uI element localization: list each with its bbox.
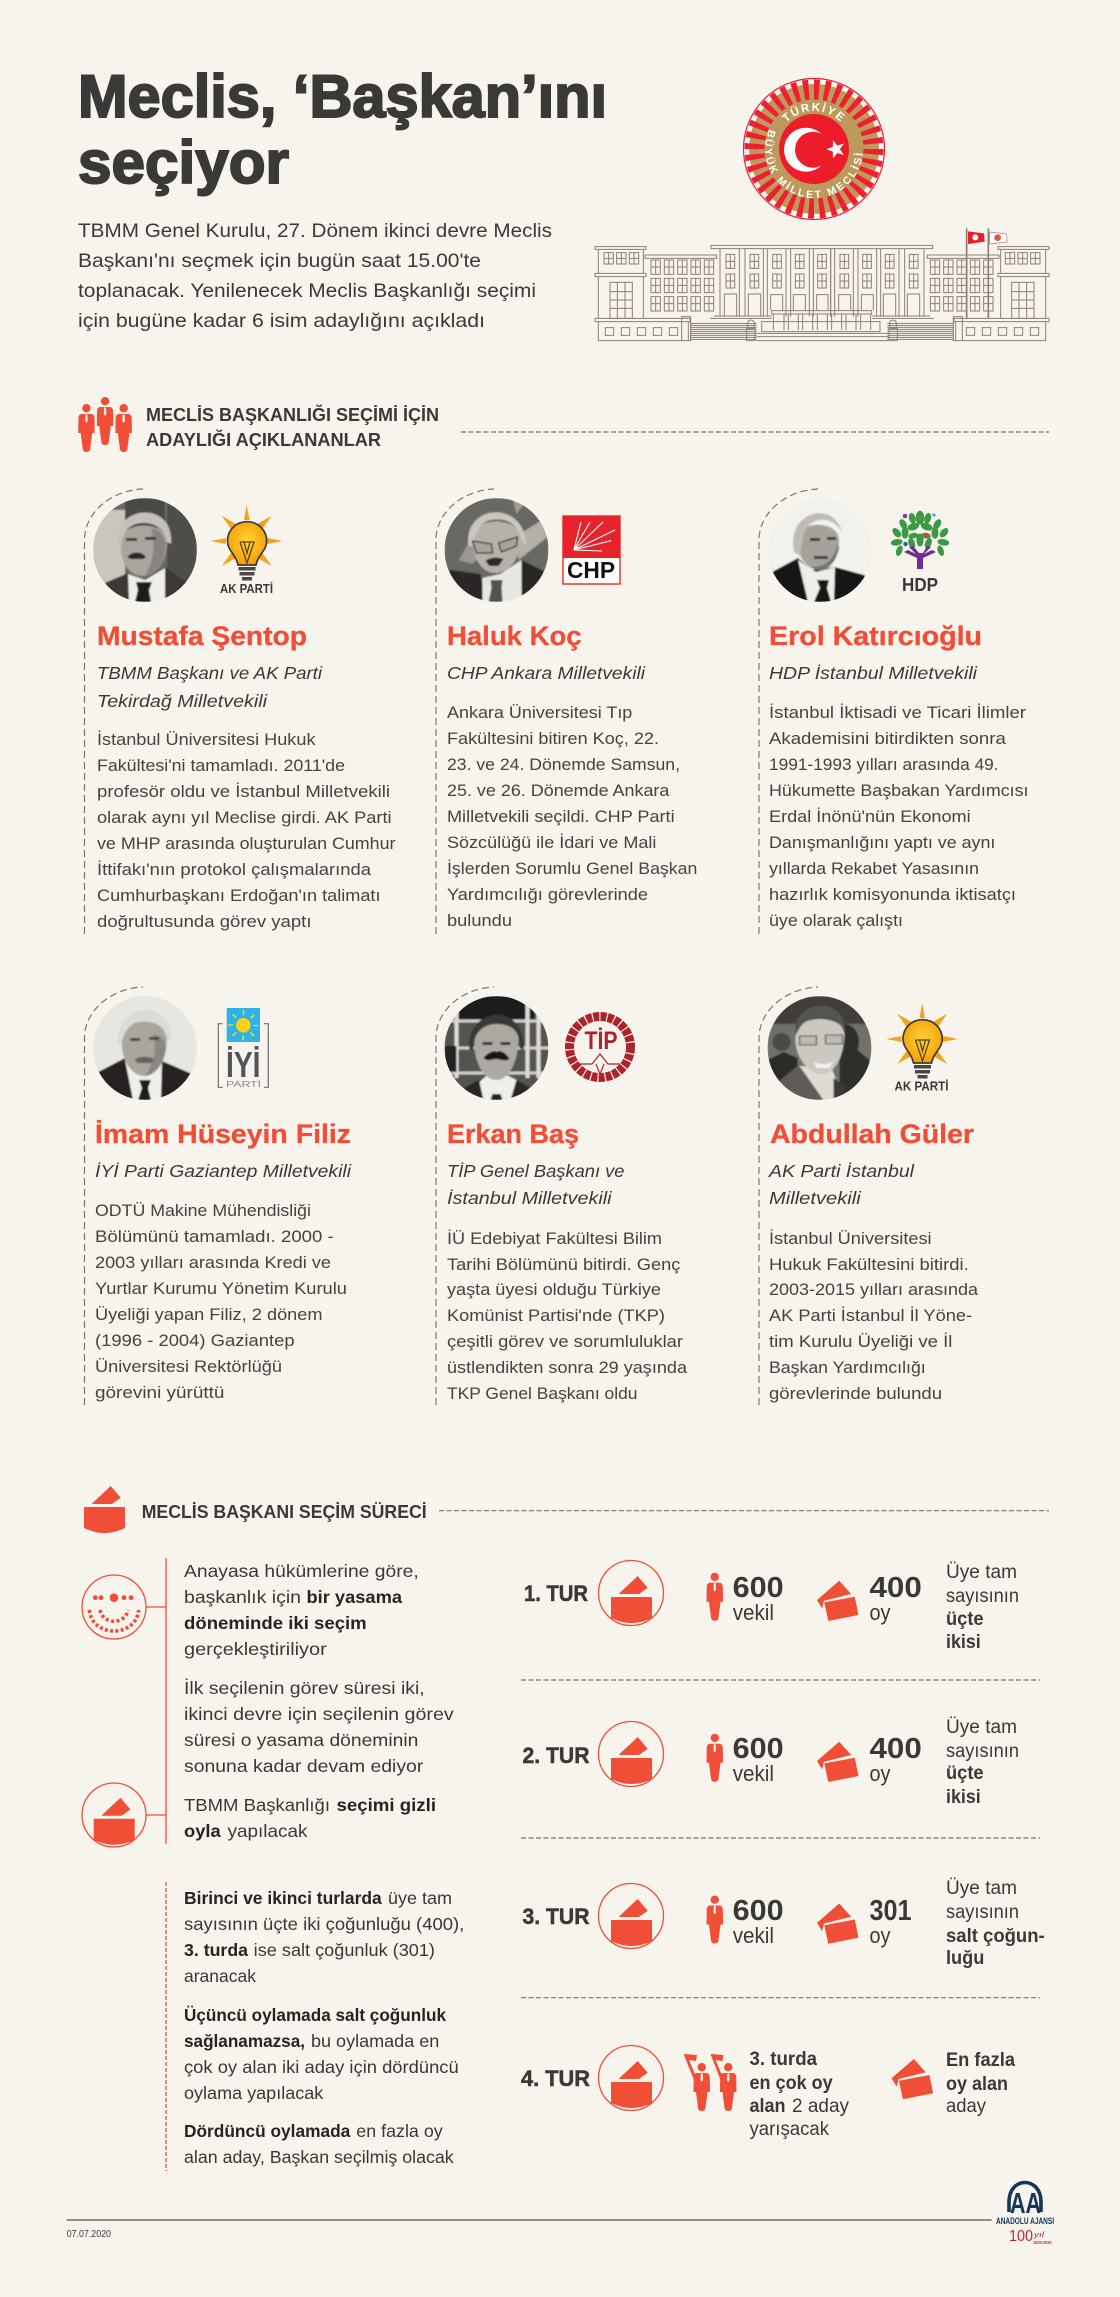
name: Abdullah Güler	[770, 1119, 975, 1149]
text: most voted candidate: oy alan	[946, 2074, 1008, 2095]
logo: İYİ Parti: İYİ	[226, 1044, 260, 1085]
requirement: salt çoğun-	[946, 1926, 1045, 1947]
role: TİP Genel Başkanı ve	[447, 1161, 625, 1181]
icon: ballot box	[84, 1486, 125, 1533]
icon: two candidates with flags	[684, 2054, 736, 2111]
biography: tim Kurulu Üyeliği ve İl	[769, 1332, 952, 1351]
text block: voting rounds explanation: en fazla oy	[356, 2121, 443, 2141]
biography: Komünist Partisi'nde (TKP)	[447, 1307, 665, 1325]
biography	[95, 1202, 347, 1402]
icon: ballot papers	[892, 2059, 933, 2099]
biography: görevlerinde bulundu	[769, 1385, 942, 1403]
photo: Erol Katırcıoğlu	[772, 512, 866, 602]
panel: İmam Hüseyin Filiz	[84, 987, 352, 1405]
biography: Cumhurbaşkanı Erdoğan'ın talimatı	[97, 887, 380, 905]
figure: 400 votes	[870, 1572, 922, 1625]
figure: 400 votes: 400	[870, 1733, 922, 1765]
role: Tekirdağ Milletvekili	[97, 691, 268, 711]
logo: İYİ Parti	[218, 1008, 268, 1089]
biography: Milletvekili seçildi. CHP Parti	[447, 808, 675, 826]
intro text	[78, 220, 552, 332]
biography: ODTÜ Makine Mühendisliği	[95, 1202, 311, 1220]
figure: 301 votes: 301	[870, 1895, 912, 1927]
icon: secret ballot circle	[82, 1783, 146, 1847]
logo: AK Parti: AK PARTİ	[894, 1079, 948, 1094]
requirement: Üye tam	[946, 1562, 1017, 1583]
role	[768, 1161, 915, 1208]
role: TBMM Başkanı ve AK Parti	[97, 663, 323, 683]
logo: AK Parti: AK PARTİ	[220, 581, 273, 596]
panel: Haluk Koç	[436, 489, 697, 934]
icon: ballot papers	[817, 1581, 858, 1621]
photo: Mustafa Şentop	[93, 498, 197, 602]
biography: 25. ve 26. Dönemde Ankara	[447, 782, 670, 800]
biography: Üyeliği yapan Filiz, 2 dönem	[95, 1306, 323, 1324]
biography: Tarihi Bölümünü bitirdi. Genç	[447, 1256, 680, 1274]
round 3	[522, 1878, 1045, 1969]
biography: Danışmanlığını yaptı ve aynı	[769, 834, 995, 852]
figure: 400 votes: oy	[870, 1600, 890, 1625]
icon: ballot in circle	[598, 1722, 664, 1786]
biography: Üniversitesi Rektörlüğü	[95, 1358, 282, 1376]
figure: 600 deputies: vekil	[733, 1761, 774, 1786]
biography: AK Parti İstanbul İl Yöne-	[769, 1306, 972, 1325]
requirement: Üye tam	[946, 1878, 1017, 1899]
biography: yıllarda Rekabet Yasasının	[769, 860, 979, 878]
requirement: sayısının	[946, 1741, 1019, 1762]
photo: Erkan Baş	[444, 996, 548, 1100]
name: İmam Hüseyin Filiz	[95, 1119, 351, 1149]
icon: TBMM seal: BÜYÜK MİLLET MECLİSİ	[765, 130, 863, 198]
biography: Erdal İnönü'nün Ekonomi	[769, 807, 971, 826]
figure: 600 deputies	[733, 1572, 784, 1625]
requirement: ikisi	[946, 1632, 981, 1653]
figure: 600 deputies	[733, 1895, 784, 1948]
illustration: parliament building	[595, 228, 1049, 341]
text block: election rules: seçimi gizli	[336, 1795, 436, 1815]
timeline: solid red connector	[146, 1558, 166, 1844]
figure: 400 votes	[870, 1733, 922, 1786]
figure: 600 deputies: vekil	[733, 1923, 774, 1948]
figure: 301 votes	[870, 1895, 912, 1948]
logo: Anadolu Ajansı: ANADOLU AJANSI	[996, 2216, 1054, 2226]
title	[78, 63, 607, 196]
panel: Abdullah Güler	[759, 987, 979, 1405]
intro text: Başkanı'nı seçmek için bugün saat 15.00'te	[78, 250, 481, 272]
text: most voted candidate	[946, 2050, 1015, 2117]
biography: Fakültesini bitiren Koç, 22.	[447, 730, 659, 748]
role: HDP İstanbul Milletvekili	[769, 663, 978, 683]
requirement: luğu	[946, 1948, 984, 1969]
role	[447, 1161, 625, 1208]
round 4	[521, 2046, 1015, 2140]
icon: ballot in circle	[598, 1884, 664, 1948]
text block: election rules: sonuna kadar devam ediyor	[184, 1756, 423, 1776]
text block: election rules: oyla	[184, 1821, 221, 1841]
round 1	[524, 1560, 1019, 1653]
logo: AK Parti	[886, 1003, 958, 1094]
biography	[447, 1229, 688, 1403]
text block: election rules: yapılacak	[228, 1821, 308, 1841]
text block: voting rounds explanation: sağlanamazsa,	[184, 2031, 305, 2051]
biography: yaşta üyesi olduğu Türkiye	[447, 1281, 661, 1299]
figure: 600 deputies	[733, 1733, 784, 1786]
biography: Akademisini bitirdikten sonra	[769, 730, 1007, 748]
text: runoff candidates: 2 aday	[792, 2096, 849, 2117]
biography	[97, 730, 396, 931]
biography: hazırlık komisyonunda iktisatçı	[769, 886, 1016, 904]
role	[97, 663, 323, 711]
text: most voted candidate: aday	[946, 2096, 986, 2117]
figure: 400 votes: oy	[870, 1761, 890, 1786]
biography: İstanbul Üniversitesi Hukuk	[97, 730, 316, 749]
role: CHP Ankara Milletvekili	[447, 663, 646, 683]
role: İYİ Parti Gaziantep Milletvekili	[95, 1161, 352, 1181]
logo: Anadolu Ajansı: 1920-2020	[1033, 2240, 1052, 2245]
icon: parliament hemicycle	[82, 1575, 146, 1639]
biography: Sözcülüğü ile İdari ve Mali	[447, 833, 656, 852]
role: AK Parti İstanbul	[768, 1161, 915, 1181]
requirement: üçte	[946, 1609, 984, 1630]
section heading: candidates: MECLİS BAŞKANLIĞI SEÇİMİ İÇİN	[146, 404, 439, 425]
text block: voting rounds explanation: sayısının üçte iki çoğunluğu (400),	[184, 1914, 464, 1934]
photo: İmam Hüseyin Filiz	[93, 996, 197, 1100]
intro text: için bugüne kadar 6 isim adaylığını açıkladı	[78, 310, 485, 332]
title: seçiyor	[78, 129, 289, 196]
logo: Anadolu Ajansı	[996, 2182, 1054, 2245]
biography: Ankara Üniversitesi Tıp	[447, 704, 632, 722]
text block: voting rounds explanation: Dördüncü oylamada	[184, 2121, 351, 2141]
biography: İstanbul İktisadi ve Ticari İlimler	[769, 703, 1027, 722]
text: runoff candidates	[750, 2049, 849, 2140]
section heading: election process	[84, 1486, 1049, 1533]
text block: voting rounds explanation: ise salt çoğunluk (301)	[254, 1940, 435, 1960]
text block: election rules: ikinci devre için seçilenin görev	[184, 1704, 454, 1724]
panel: Erol Katırcıoğlu	[759, 489, 1028, 934]
text: runoff candidates: 3. turda	[750, 2049, 817, 2070]
biography: üye olarak çalıştı	[769, 912, 903, 930]
figure: 600 deputies: 600	[733, 1895, 784, 1927]
biography: 2003-2015 yılları arasında	[769, 1281, 979, 1299]
panel: Erkan Baş	[436, 987, 688, 1405]
intro text: TBMM Genel Kurulu, 27. Dönem ikinci devre Meclis	[78, 220, 552, 242]
biography: İttifakı'nın protokol çalışmalarında	[97, 860, 372, 879]
biography: İÜ Edebiyat Fakültesi Bilim	[447, 1229, 662, 1248]
panel: Mustafa Şentop	[84, 489, 396, 934]
text block: voting rounds explanation: çok oy alan iki aday için dördüncü	[184, 2057, 459, 2077]
icon: ballot in circle	[598, 2046, 664, 2110]
biography: TKP Genel Başkanı oldu	[447, 1385, 638, 1403]
icon: TBMM seal	[742, 78, 886, 220]
logo: TİP	[570, 1016, 630, 1078]
text: runoff candidates: yarışacak	[750, 2119, 829, 2140]
text block: voting rounds explanation: oylama yapılacak	[184, 2083, 324, 2103]
text block: voting rounds explanation: 3. turda	[184, 1940, 248, 1960]
photo: Haluk Koç	[444, 498, 548, 602]
text block: voting rounds explanation: aranacak	[184, 1966, 256, 1986]
date: 07.07.2020	[67, 2229, 111, 2240]
text block: election rules: bir yasama	[306, 1587, 402, 1607]
logo: HDP: HDP	[902, 574, 938, 595]
text block: election rules	[184, 1561, 454, 1841]
biography	[769, 1229, 979, 1403]
icon: TBMM seal: TÜRKİYE	[781, 102, 845, 122]
figure: 600 deputies: 600	[733, 1572, 784, 1604]
text block: voting rounds explanation: Üçüncü oylamada salt çoğunluk	[184, 2005, 446, 2025]
biography: İstanbul Üniversitesi	[769, 1229, 932, 1248]
requirement	[946, 1878, 1045, 1969]
round 2	[522, 1717, 1019, 1808]
section heading: candidates: ADAYLIĞI AÇIKLANANLAR	[146, 429, 381, 450]
footer rule	[67, 2219, 992, 2221]
section heading: election process: MECLİS BAŞKANI SEÇİM SÜRECİ	[142, 1501, 427, 1522]
biography: ve MHP arasında oluşturulan Cumhur	[97, 835, 396, 853]
biography: üstlendikten sonra 29 yaşında	[447, 1359, 688, 1377]
logo: Anadolu Ajansı: yıl	[1033, 2232, 1045, 2239]
icon: deputy	[706, 1896, 723, 1944]
biography: doğrultusunda görev yaptı	[97, 913, 312, 931]
text: runoff candidates: en çok oy	[750, 2073, 833, 2094]
logo: CHP: CHP	[567, 557, 615, 583]
biography: görevini yürüttü	[95, 1384, 224, 1402]
logo: CHP	[563, 516, 620, 584]
logo: Anadolu Ajansı: 100	[1009, 2228, 1033, 2245]
icon: deputy	[706, 1573, 723, 1621]
round 2: 2. TUR	[522, 1743, 590, 1768]
figure: 600 deputies: vekil	[733, 1600, 774, 1625]
biography: 23. ve 24. Dönemde Samsun,	[447, 756, 680, 774]
logo: İYİ Parti: PARTİ	[226, 1079, 261, 1089]
text block: election rules: döneminde iki seçim	[184, 1613, 367, 1633]
text block: election rules: gerçekleştiriliyor	[184, 1639, 327, 1659]
text block: voting rounds explanation: bu oylamada en	[311, 2031, 439, 2051]
biography: Başkan Yardımcılığı	[769, 1359, 926, 1377]
text block: election rules: süresi o yasama döneminin	[184, 1730, 418, 1750]
logo: HDP	[890, 511, 950, 595]
biography: 1991-1993 yılları arasında 49.	[769, 756, 999, 774]
text block: voting rounds explanation: üye tam	[388, 1888, 452, 1908]
icon: ballot papers	[817, 1904, 858, 1944]
biography: profesör oldu ve İstanbul Milletvekili	[97, 782, 390, 801]
biography: Fakültesi'ni tamamladı. 2011'de	[97, 757, 345, 775]
biography: Bölümünü tamamladı. 2000 -	[95, 1228, 334, 1246]
logo: AK Parti	[211, 505, 283, 596]
section heading: candidates	[78, 397, 1049, 452]
requirement	[946, 1562, 1019, 1653]
timeline: dashed red connector	[165, 1882, 167, 2171]
text block: voting rounds explanation	[184, 1888, 464, 2167]
figure: 301 votes: oy	[870, 1923, 890, 1948]
biography: İşlerden Sorumlu Genel Başkan	[447, 859, 697, 878]
round 3: 3. TUR	[522, 1904, 590, 1929]
requirement: ikisi	[946, 1787, 981, 1808]
text block: voting rounds explanation: alan aday, Başkan seçilmiş olacak	[184, 2147, 454, 2167]
requirement: sayısının	[946, 1586, 1019, 1607]
biography	[447, 704, 697, 930]
logo: Anadolu Ajansı: AA	[1010, 2188, 1041, 2220]
biography: Yurtlar Kurumu Yönetim Kurulu	[95, 1280, 347, 1298]
text block: election rules: Anayasa hükümlerine göre,	[184, 1561, 419, 1581]
name: Haluk Koç	[447, 621, 582, 651]
text: runoff candidates: alan	[750, 2096, 786, 2117]
biography: Hükumette Başbakan Yardımcısı	[769, 782, 1028, 800]
icon: ballot papers	[817, 1742, 858, 1782]
text block: election rules: İlk seçilenin görev süresi iki,	[184, 1678, 425, 1698]
biography: olarak aynı yıl Meclise girdi. AK Parti	[97, 809, 392, 827]
biography: 2003 yılları arasında Kredi ve	[95, 1254, 331, 1272]
text block: election rules: başkanlık için	[184, 1587, 301, 1607]
biography: (1996 - 2004) Gaziantep	[95, 1332, 295, 1350]
icon: three people	[78, 397, 132, 452]
logo: TİP: TİP	[584, 1027, 618, 1055]
requirement	[946, 1717, 1019, 1808]
role: Milletvekili	[769, 1188, 862, 1208]
figure: 600 deputies: 600	[733, 1733, 784, 1765]
biography: Yardımcılığı görevlerinde	[447, 886, 648, 904]
name: Erkan Baş	[447, 1119, 579, 1149]
requirement: sayısının	[946, 1902, 1019, 1923]
intro text: toplanacak. Yenilenecek Meclis Başkanlığı seçimi	[78, 280, 536, 302]
name: Erol Katırcıoğlu	[769, 621, 982, 651]
round 1: 1. TUR	[524, 1581, 588, 1606]
name: Mustafa Şentop	[97, 621, 307, 651]
text block: election rules: TBMM Başkanlığı	[184, 1795, 330, 1815]
biography: bulundu	[447, 912, 512, 930]
round 4: 4. TUR	[521, 2066, 590, 2091]
requirement: üçte	[946, 1763, 984, 1784]
photo: Abdullah Güler	[768, 996, 872, 1100]
figure: 400 votes: 400	[870, 1572, 922, 1604]
icon: deputy	[706, 1734, 723, 1782]
biography: çeşitli görev ve sorumluluklar	[447, 1333, 684, 1351]
icon: ballot in circle	[598, 1560, 664, 1626]
title: Meclis, ‘Başkan’ını	[78, 63, 607, 130]
biography: Hukuk Fakültesini bitirdi.	[769, 1256, 969, 1274]
text block: voting rounds explanation: Birinci ve ikinci turlarda	[184, 1888, 382, 1908]
text: most voted candidate: En fazla	[946, 2050, 1015, 2071]
role: İstanbul Milletvekili	[447, 1188, 613, 1208]
requirement: Üye tam	[946, 1717, 1017, 1738]
biography	[769, 703, 1028, 930]
